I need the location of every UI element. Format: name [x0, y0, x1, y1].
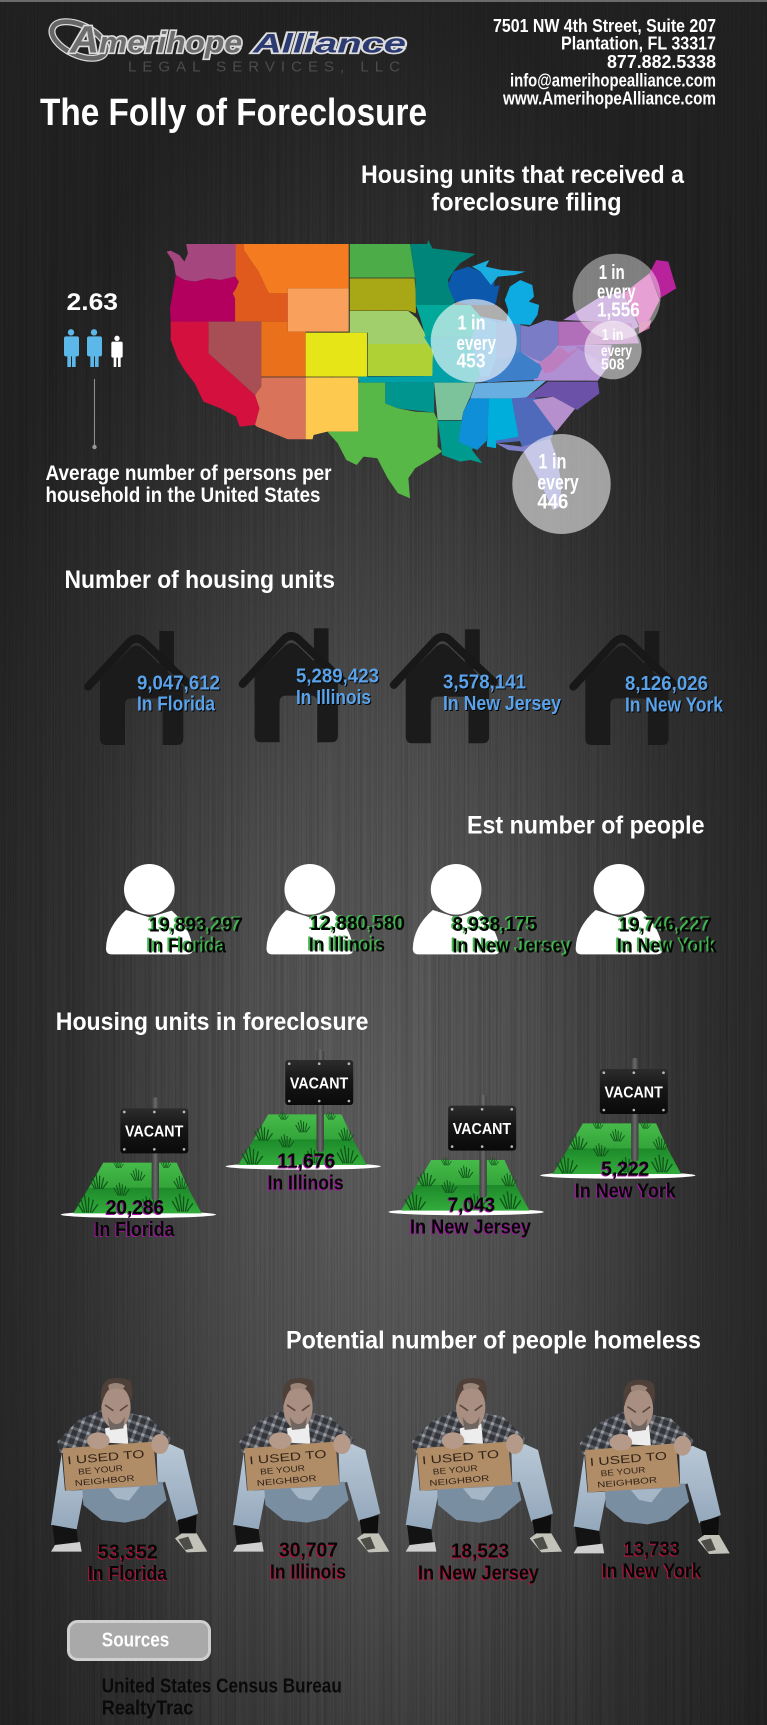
- connector line: [92, 379, 97, 449]
- homeless man: Florida: I USED TO: [67, 1449, 145, 1467]
- stat caption: Average number of persons per: [46, 462, 332, 485]
- house: Illinois: [243, 628, 379, 742]
- homeless man: Illinois: [233, 1378, 389, 1583]
- vacant sign: Illinois: In Illinois: [268, 1172, 344, 1194]
- house: New York: 8,126,026: [625, 673, 708, 695]
- homeless man: Florida: In Florida: [88, 1563, 168, 1585]
- vacant sign: New Jersey: [388, 1095, 544, 1238]
- homeless man: New Jersey: BE YOUR: [432, 1463, 478, 1477]
- bubble: Illinois: 453: [456, 350, 486, 372]
- person: Illinois: [266, 864, 405, 957]
- heading: est number of people: Est number of people: [467, 811, 705, 839]
- bubble: New Jersey: every: [601, 343, 632, 360]
- homeless man: New Jersey: NEIGHBOR: [429, 1473, 490, 1488]
- house: New York: In New York: [625, 695, 724, 717]
- homeless man: Illinois: NEIGHBOR: [256, 1473, 317, 1488]
- contact details: Plantation, FL 33317: [561, 34, 716, 54]
- map: United States with foreclosure bubbles: [167, 240, 676, 534]
- house: New Jersey: [394, 629, 562, 743]
- heading: housing units in foreclosure: Housing units in foreclosure: [56, 1008, 368, 1036]
- person: Illinois: 12,880,580: [310, 913, 405, 935]
- bubble: Florida: 446: [537, 490, 568, 513]
- contact details: www.AmerihopeAlliance.com: [502, 88, 716, 108]
- house: Florida: [88, 631, 220, 745]
- sources button: Sources: [102, 1630, 169, 1652]
- person: New York: 19,746,227: [619, 915, 712, 937]
- house: New Jersey: 3,578,141: [443, 671, 526, 693]
- person: New York: [576, 864, 718, 958]
- house: New York: [573, 631, 724, 745]
- homeless man: New Jersey: [406, 1378, 562, 1584]
- homeless man: New York: [573, 1380, 730, 1582]
- vacant sign: Florida: In Florida: [94, 1219, 175, 1241]
- homeless man: New Jersey: In New Jersey: [418, 1562, 540, 1584]
- contact details: 877.882.5338: [607, 52, 716, 72]
- house: New Jersey: In New Jersey: [443, 693, 562, 715]
- homeless man: Florida: [51, 1378, 207, 1585]
- stat caption: household in the United States: [46, 484, 320, 507]
- bubble: Florida: every: [537, 471, 579, 494]
- homeless man: New York: NEIGHBOR: [597, 1474, 657, 1490]
- person: New York: In New York: [617, 936, 718, 958]
- vacant sign: New York: In New York: [575, 1180, 677, 1202]
- vacant sign: New Jersey: 7,043: [448, 1195, 495, 1217]
- person: Florida: [106, 864, 243, 958]
- heading: housing units that received a foreclosure filing: [361, 161, 685, 216]
- stat value: 2.63: [66, 289, 118, 316]
- vacant sign: New York: 5,222: [601, 1159, 649, 1181]
- homeless man: New Jersey: I USED TO: [422, 1449, 500, 1467]
- house: Illinois: 5,289,423: [296, 666, 379, 688]
- vacant sign: New Jersey: VACANT: [453, 1121, 511, 1138]
- contact details: info@amerihopealliance.com: [510, 70, 716, 90]
- vacant sign: New York: VACANT: [604, 1084, 663, 1101]
- state shapes: [167, 240, 676, 510]
- heading: potential number of people homeless: Potential number of people homeless: [286, 1326, 701, 1354]
- heading: number of housing units: Number of housing units: [64, 566, 335, 594]
- homeless man: New York: BE YOUR: [600, 1464, 646, 1478]
- homeless man: New York: I USED TO: [589, 1450, 668, 1469]
- bubble: New York: every: [597, 281, 636, 303]
- logo: Amerihope Alliance Legal Services: [46, 14, 406, 76]
- homeless man: Illinois: BE YOUR: [260, 1463, 305, 1477]
- vacant sign: Illinois: [226, 1049, 381, 1194]
- logo: Amerihope Alliance Legal Services: Alliance: [252, 28, 406, 58]
- bubble: New York: 1 in: [599, 262, 625, 284]
- house: Illinois: In Illinois: [296, 687, 371, 709]
- sources button: [68, 1622, 210, 1660]
- heading: housing units that received a foreclosure filing: Housing units that received a: [361, 161, 685, 189]
- vacant sign: Illinois: 11,676: [277, 1150, 335, 1172]
- bubble: New York: [573, 254, 661, 340]
- stat caption: [46, 462, 332, 507]
- person: Florida: In Florida: [148, 936, 227, 958]
- logo: Amerihope Alliance Legal Services: Amerihope: [69, 20, 242, 62]
- homeless man: New Jersey: 18,523: [451, 1540, 509, 1562]
- vacant sign: New York: [540, 1058, 695, 1202]
- sources list: [102, 1676, 342, 1719]
- logo: Amerihope Alliance Legal Services: LEGAL SERVICES, LLC: [128, 58, 400, 76]
- homeless man: Florida: 53,352: [98, 1541, 158, 1563]
- homeless man: New York: In New York: [602, 1560, 702, 1582]
- house: Florida: In Florida: [137, 694, 216, 716]
- bubble: New Jersey: 508: [601, 356, 624, 373]
- icon: people: [64, 329, 123, 367]
- vacant sign: Florida: 20,286: [106, 1197, 164, 1219]
- heading: housing units that received a foreclosure filing: foreclosure filing: [432, 188, 622, 216]
- homeless man: Illinois: In Illinois: [270, 1561, 346, 1583]
- homeless man: Illinois: 30,707: [279, 1540, 338, 1562]
- bubble: New Jersey: [584, 321, 642, 379]
- vacant sign: New Jersey: In New Jersey: [410, 1216, 532, 1238]
- homeless man: Florida: NEIGHBOR: [74, 1473, 135, 1488]
- title: The Folly of Foreclosure: [40, 92, 427, 134]
- sources list: United States Census Bureau: [102, 1676, 342, 1698]
- sources list: RealtyTrac: [102, 1697, 193, 1719]
- person: New Jersey: [413, 864, 573, 958]
- person: New Jersey: 8,938,175: [452, 914, 538, 936]
- contact details: [493, 16, 716, 108]
- stat: average household size: [46, 289, 332, 507]
- homeless man: Illinois: I USED TO: [249, 1449, 327, 1467]
- bubble: Florida: [512, 434, 611, 534]
- vacant sign: Florida: VACANT: [125, 1124, 183, 1141]
- person: Florida: 19,893,297: [149, 915, 243, 937]
- bubble: Illinois: [431, 299, 517, 382]
- contact details: 7501 NW 4th Street, Suite 207: [493, 16, 716, 36]
- bubble: Illinois: 1 in: [458, 312, 486, 334]
- bubble: Florida: 1 in: [538, 450, 566, 473]
- bubble: New York: 1,556: [597, 300, 640, 322]
- vacant sign: Illinois: VACANT: [290, 1075, 348, 1092]
- person: New Jersey: In New Jersey: [452, 936, 573, 958]
- house: Florida: 9,047,612: [137, 672, 220, 694]
- vacant sign: Florida: [61, 1097, 216, 1241]
- bubble: Illinois: every: [456, 333, 497, 355]
- homeless man: Florida: BE YOUR: [78, 1463, 123, 1477]
- homeless man: New York: 13,733: [624, 1539, 680, 1561]
- person: Illinois: In Illinois: [309, 935, 385, 957]
- bubble: New Jersey: 1 in: [602, 327, 624, 344]
